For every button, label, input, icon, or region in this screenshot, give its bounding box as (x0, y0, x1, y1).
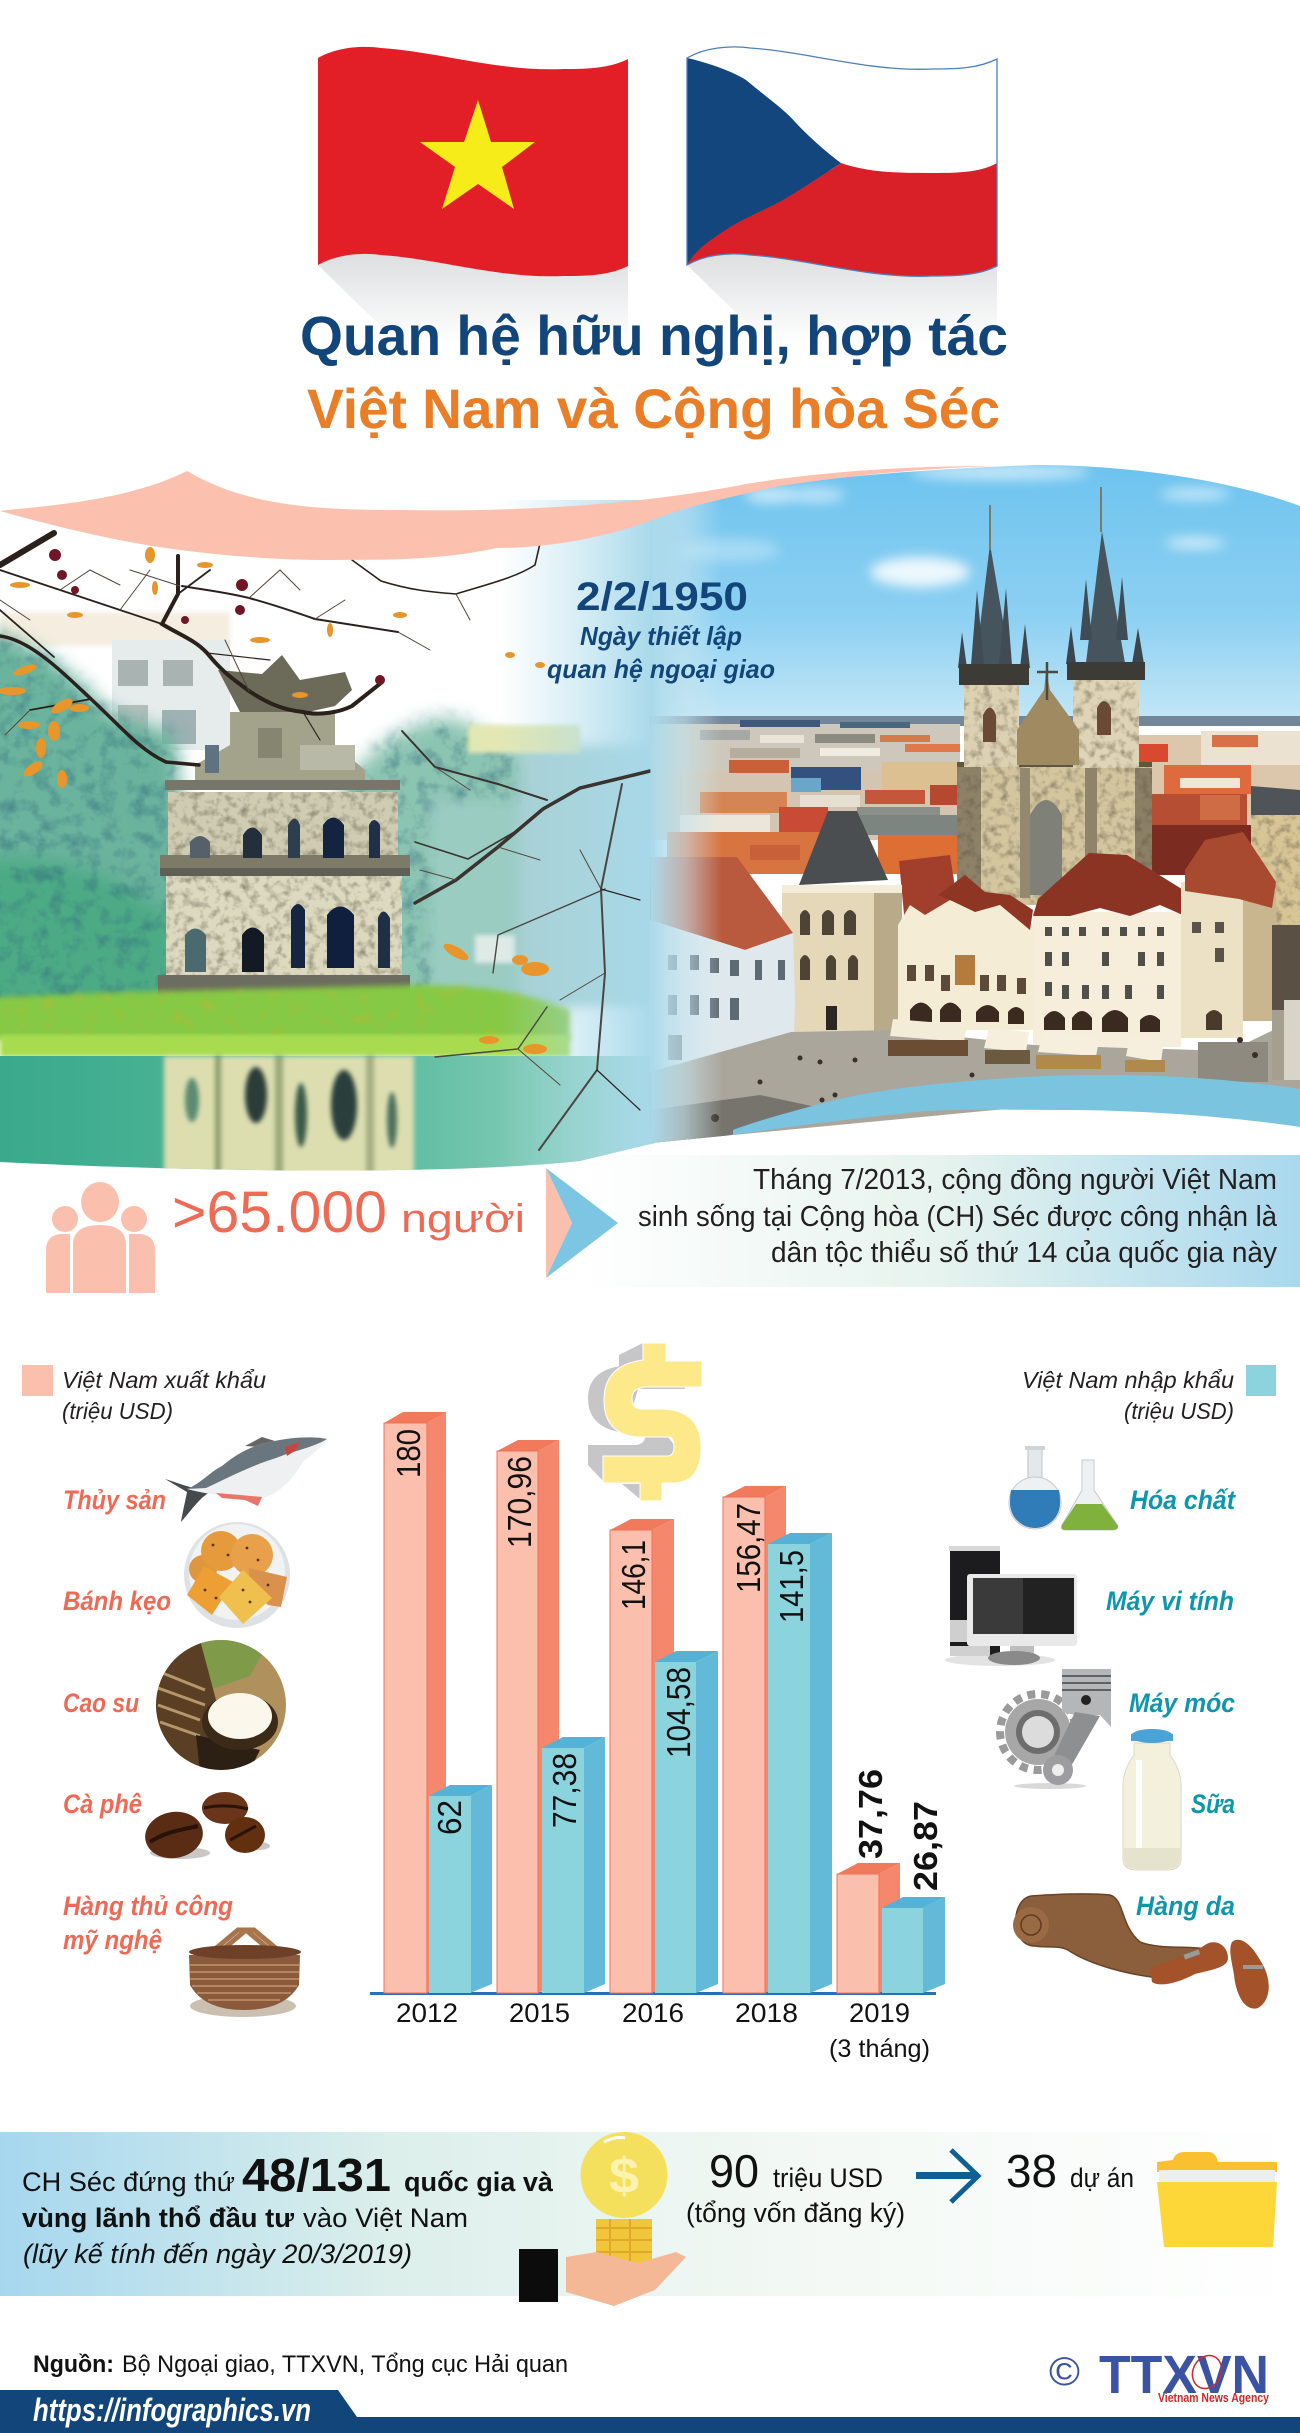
year labels: 2019 (849, 1998, 910, 2028)
stone tower house (782, 811, 902, 1035)
bars 2019 (837, 1863, 945, 1993)
source: Nguồn: (33, 2351, 114, 2378)
import product labels: Máy vi tính (1106, 1586, 1234, 1616)
banner background (580, 1155, 1300, 1287)
icon: leather goods (1013, 1894, 1269, 2009)
bar values: 62 (431, 1800, 468, 1835)
date callout (547, 575, 775, 684)
icon: wicker basket (189, 1930, 301, 2017)
text: Vietnamese community: sinh sống tại Cộng hòa (CH) Séc được công nhận là (638, 1201, 1278, 1233)
date callout: 2/2/1950 (576, 575, 748, 619)
import product labels: Sữa (1191, 1789, 1235, 1819)
figure: registered capital: triệu USD (773, 2163, 883, 2193)
export product labels: Cao su (63, 1688, 139, 1718)
bar values: 104,58 (660, 1667, 697, 1758)
Tyn church body (957, 487, 1152, 905)
icon: hand holding coin (519, 2132, 686, 2306)
population figure: người (401, 1197, 525, 1241)
clouds (680, 464, 1230, 587)
logo: TTXVN: Vietnam News Agency (1158, 2390, 1270, 2405)
bar values: 170,96 (501, 1456, 538, 1548)
square and awnings (650, 925, 1300, 1155)
orange roofs (667, 815, 957, 915)
bars 2016 (610, 1519, 718, 1993)
bar values (390, 1429, 944, 1891)
tree branches (0, 533, 650, 1150)
bar values: 156,47 (730, 1503, 767, 1593)
tower body (158, 780, 410, 997)
lake island grass (0, 985, 570, 1040)
export product labels (63, 1485, 233, 1955)
import product labels (1106, 1485, 1236, 1921)
investment band background (0, 2132, 1300, 2296)
bars 2015 (497, 1440, 605, 1993)
figure: projects: 38 (1006, 2145, 1057, 2197)
bar values: 180 (390, 1429, 427, 1478)
left church tower (958, 505, 1030, 767)
text: investment ranking: 48/131 (242, 2149, 391, 2201)
text: Vietnamese community (638, 1164, 1278, 1269)
footer bar (0, 2390, 1300, 2433)
white house with red roof (1033, 853, 1185, 1047)
logo: TTXVN: © (1049, 2350, 1080, 2394)
icon: biscuits (184, 1522, 290, 1628)
right church tower (1066, 487, 1145, 768)
flag: Vietnam (318, 47, 628, 345)
icon: hand holding coin: $ (609, 2148, 639, 2204)
legend: imports: (triệu USD) (1124, 1398, 1234, 1424)
title (300, 304, 1008, 440)
legend: exports (22, 1365, 266, 1424)
autumn leaves (0, 547, 549, 1054)
baroque palace (650, 857, 795, 1075)
bars 2012 (384, 1412, 492, 1993)
icon: chemistry flasks (1009, 1446, 1118, 1530)
banner wave: salmon (0, 466, 995, 560)
icon: computer (945, 1546, 1077, 1666)
footer bar: https://infographics.vn (33, 2392, 311, 2428)
title: Việt Nam và Cộng hòa Séc (307, 377, 1000, 440)
legend: imports: Việt Nam nhập khẩu (1022, 1367, 1234, 1393)
text: investment ranking: vùng lãnh thổ đầu tư (22, 2203, 294, 2233)
flag: Czech Republic (687, 47, 997, 345)
icon: coffee beans (141, 1792, 270, 1863)
figure: registered capital: (tổng vốn đăng ký) (686, 2198, 905, 2228)
left edge fog (650, 500, 719, 1143)
export product labels: Cà phê (63, 1789, 142, 1819)
lake water (0, 1056, 655, 1181)
export product labels: Hàng thủ công (63, 1891, 233, 1921)
text: investment ranking: (lũy kế tính đến ngày 20/3/2019) (23, 2239, 412, 2269)
date callout: quan hệ ngoại giao (547, 654, 775, 684)
banner wave: blue (733, 1075, 1300, 1135)
text: investment ranking: quốc gia và (404, 2167, 554, 2197)
bar values: 77,38 (546, 1753, 583, 1828)
bar values: 146,1 (615, 1540, 652, 1610)
chart baseline (370, 1992, 936, 1995)
import product labels: Hàng da (1136, 1891, 1235, 1921)
text: investment ranking: vào Việt Nam (303, 2203, 468, 2233)
icon: folder (1157, 2152, 1277, 2247)
photo: Turtle Tower, Hanoi (0, 500, 670, 1181)
title: Quan hệ hữu nghị, hợp tác (300, 304, 1008, 367)
photo: Old Town Square, Prague (650, 460, 1300, 1160)
text: Vietnamese community: Tháng 7/2013, cộng đồng người Việt Nam (753, 1164, 1277, 1196)
population figure: >65.000 (172, 1180, 387, 1245)
year labels: (3 tháng) (829, 2035, 930, 2063)
icon: milk bottle (1123, 1729, 1181, 1870)
legend: imports (1022, 1365, 1276, 1424)
bar values: 26,87 (907, 1801, 944, 1891)
year labels: 2018 (735, 1998, 798, 2028)
bars 2018 (723, 1486, 832, 1993)
arrow: capital to projects (916, 2150, 978, 2202)
import product labels: Hóa chất (1130, 1485, 1236, 1515)
guild houses (898, 875, 1033, 1030)
year labels: 2012 (396, 1998, 458, 2028)
export product labels: Bánh kẹo (63, 1586, 171, 1616)
population figure (172, 1180, 525, 1245)
legend: exports: (triệu USD) (62, 1398, 173, 1424)
figure: registered capital: 90 (709, 2145, 759, 2197)
date callout: Ngày thiết lập (580, 621, 742, 651)
import product labels: Máy móc (1129, 1688, 1235, 1718)
source: Bộ Ngoại giao, TTXVN, Tổng cục Hải quan (122, 2351, 568, 2378)
icon: people (46, 1182, 155, 1293)
figure: projects (1006, 2145, 1134, 2197)
text: Vietnamese community: dân tộc thiểu số thứ 14 của quốc gia này (771, 1237, 1277, 1269)
icon: fish (165, 1437, 327, 1522)
year labels: 2015 (509, 1998, 570, 2028)
arrow: chevron (546, 1168, 618, 1278)
icon: machinery gear and piston (1000, 1669, 1111, 1789)
distant city (650, 716, 1300, 925)
right corner house (1181, 832, 1276, 1038)
year labels (396, 1998, 930, 2063)
tower reflection (164, 1056, 414, 1181)
bar chart (370, 1412, 945, 2063)
bar values: 37,76 (852, 1769, 889, 1859)
legend: exports: Việt Nam xuất khẩu (62, 1367, 266, 1393)
figure: registered capital (686, 2145, 905, 2228)
export product labels: Thủy sản (63, 1485, 166, 1515)
export product labels: mỹ nghệ (63, 1925, 162, 1955)
tower upper roof (195, 655, 365, 790)
icon: rubber tapping (156, 1640, 286, 1772)
logo: TTXVN: TTXVN (1099, 2345, 1269, 2405)
icon: dollar sign (588, 1343, 702, 1501)
text: investment ranking: CH Séc đứng thứ (22, 2167, 235, 2197)
central gable (1017, 670, 1079, 765)
year labels: 2016 (622, 1998, 684, 2028)
right side fog (500, 500, 655, 1180)
bar values: 141,5 (773, 1550, 810, 1623)
text: investment ranking (22, 2149, 554, 2269)
figure: projects: dự án (1070, 2163, 1134, 2193)
